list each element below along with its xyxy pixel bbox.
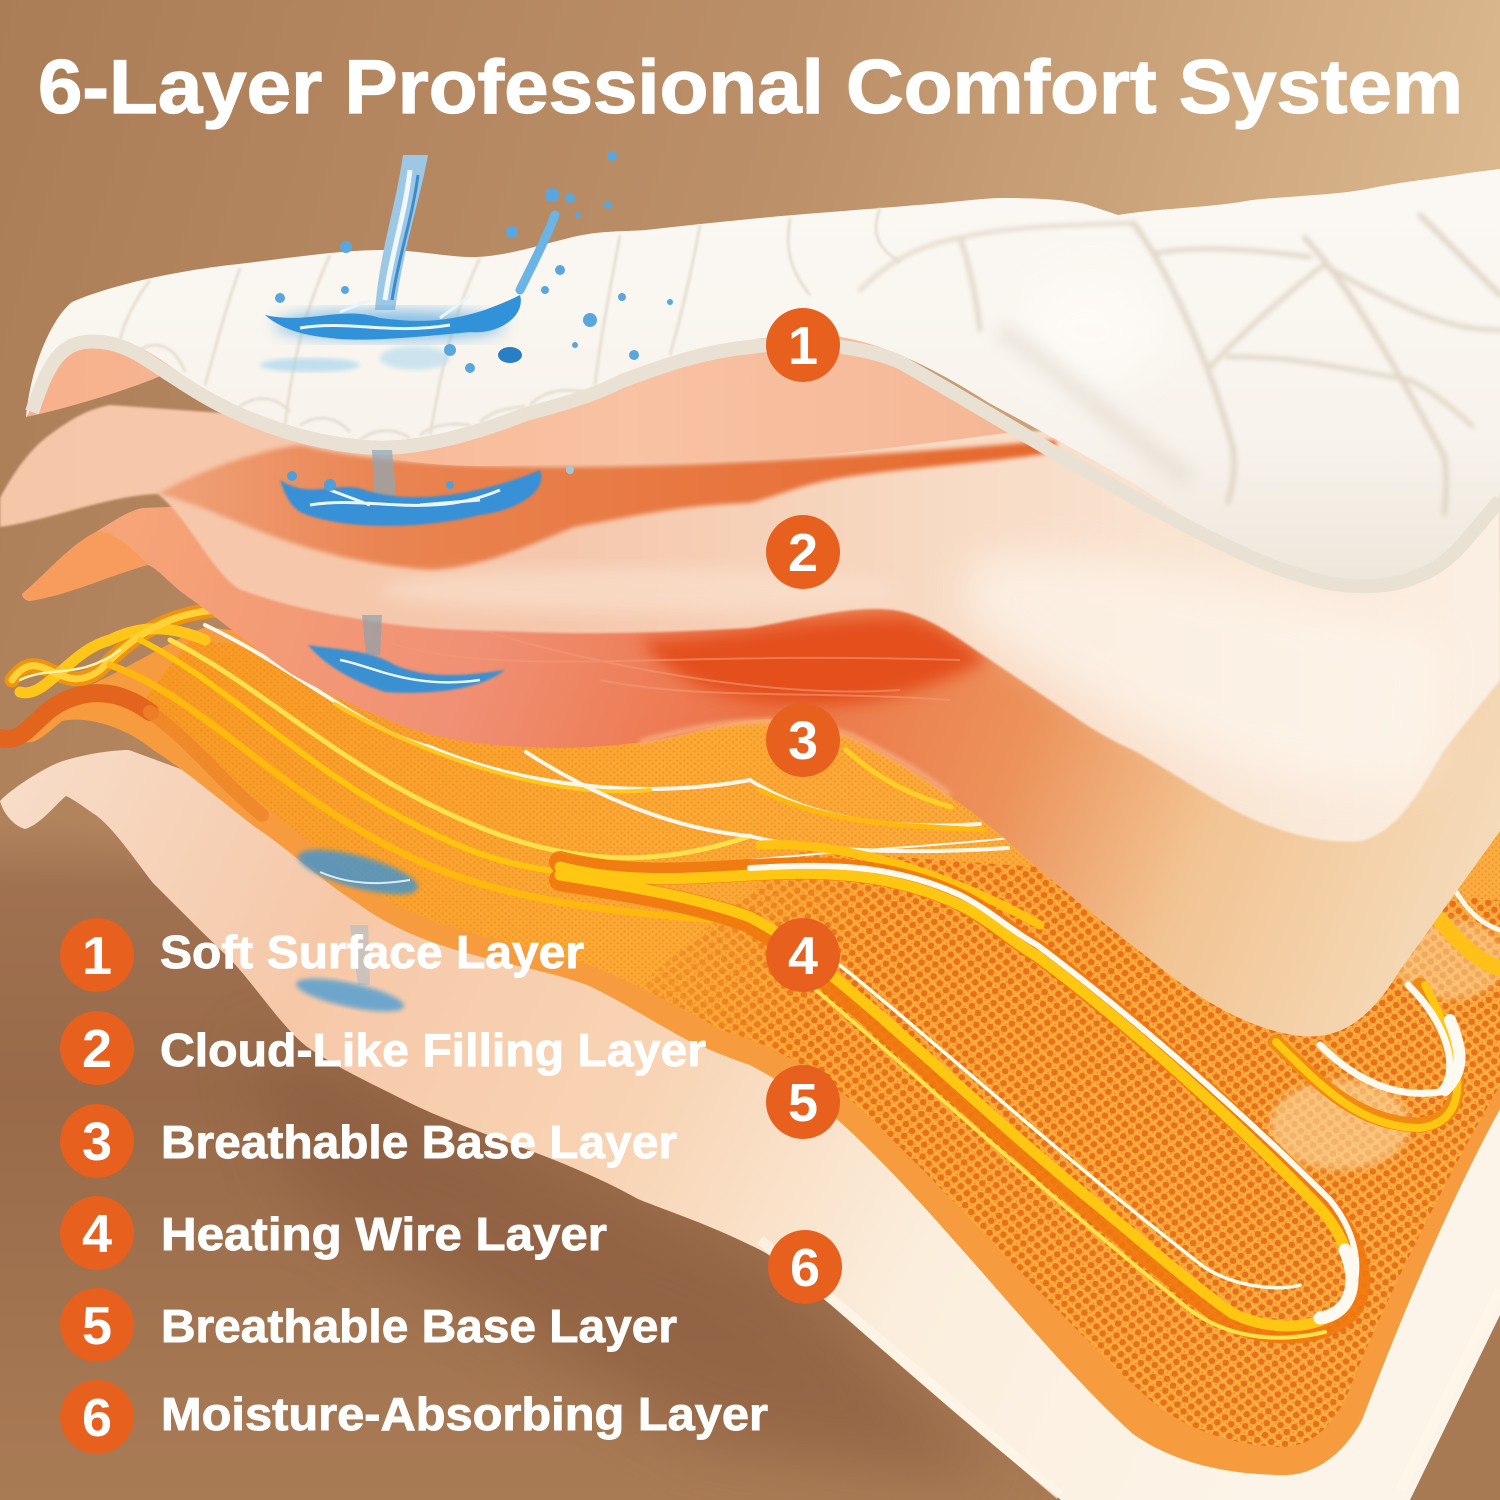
- legend item 1: 1: [82, 926, 112, 986]
- layer 6: moisture-absorbing layer: [0, 750, 1500, 1500]
- layer 1: soft surface layer: [26, 169, 1500, 591]
- droplets: [275, 151, 673, 373]
- legend item 6: Moisture-Absorbing Layer: [161, 1388, 768, 1440]
- honeycomb surface: [140, 640, 1500, 1447]
- wire: thin strands fan: [110, 625, 1040, 925]
- number badge 4: 4: [788, 926, 818, 986]
- legend item 2: [60, 1011, 706, 1085]
- number badge 6: [768, 1230, 842, 1304]
- legend item 2: Cloud-Like Filling Layer: [160, 1024, 706, 1076]
- number badge 6: 6: [790, 1238, 820, 1298]
- quilted surface: [26, 169, 1500, 591]
- water splash on surface layer: [260, 151, 673, 373]
- wire: right hand loop: [1276, 890, 1500, 1128]
- legend item 1: [60, 918, 584, 992]
- water stream: [375, 155, 428, 310]
- legend item 2: 2: [82, 1019, 112, 1079]
- legend item 3: 3: [82, 1112, 112, 1172]
- rim of top layer: [32, 342, 1500, 586]
- title: 6-Layer Professional Comfort System: [38, 45, 1463, 130]
- underside of top layer: [26, 300, 1030, 466]
- blue pool: [275, 311, 505, 339]
- soft highlight and shade: [1020, 275, 1160, 385]
- number badge 5: [766, 1065, 840, 1139]
- water passing through heating layer: [294, 840, 422, 1018]
- small left quilting: [120, 208, 900, 440]
- legend item 4: 4: [82, 1204, 112, 1264]
- wire: twisted end on the left: [12, 610, 215, 693]
- legend item 5: 5: [82, 1296, 112, 1356]
- layer 3: breathable base layer: [22, 480, 1500, 1036]
- dark orange front edge: [0, 693, 150, 739]
- number badge 3: [766, 703, 840, 777]
- deep red shaded zone: [640, 617, 989, 705]
- layer 2: cloud-like filling layer: [0, 405, 1500, 842]
- legend item 1: Soft Surface Layer: [160, 926, 584, 978]
- legend item 4: [60, 1196, 607, 1270]
- number badge 3: 3: [788, 711, 818, 771]
- pale wear spots: [1270, 1080, 1410, 1170]
- layer 5: breathable base layer with honeycomb: [0, 627, 1500, 1475]
- legend item 3: [60, 1104, 677, 1178]
- number badge 2: 2: [788, 523, 818, 583]
- quilting seams: [860, 215, 1500, 514]
- legend item 5: [60, 1288, 677, 1362]
- layer 4: heating wire layer: [12, 610, 1500, 1338]
- layer 3 underside tip: [22, 532, 148, 601]
- orange gap under top layer: [158, 440, 1056, 570]
- number badge 1: [766, 308, 840, 382]
- legend item 6: 6: [82, 1388, 112, 1448]
- wire: main hairpin: [560, 862, 1359, 1338]
- legend item 5: Breathable Base Layer: [161, 1300, 677, 1352]
- legend item 6: [60, 1380, 768, 1454]
- bright cream fluff: [964, 556, 1440, 784]
- legend item 4: Heating Wire Layer: [161, 1208, 607, 1260]
- number badge 4: [766, 918, 840, 992]
- legend item 3: Breathable Base Layer: [161, 1116, 677, 1168]
- number badge 2: [766, 515, 840, 589]
- legend: [60, 918, 768, 1454]
- number badge 5: 5: [788, 1073, 818, 1133]
- water passing through breathable layer: [308, 615, 505, 693]
- water passing through filling layer: [280, 450, 574, 526]
- number badge 1: 1: [788, 316, 818, 376]
